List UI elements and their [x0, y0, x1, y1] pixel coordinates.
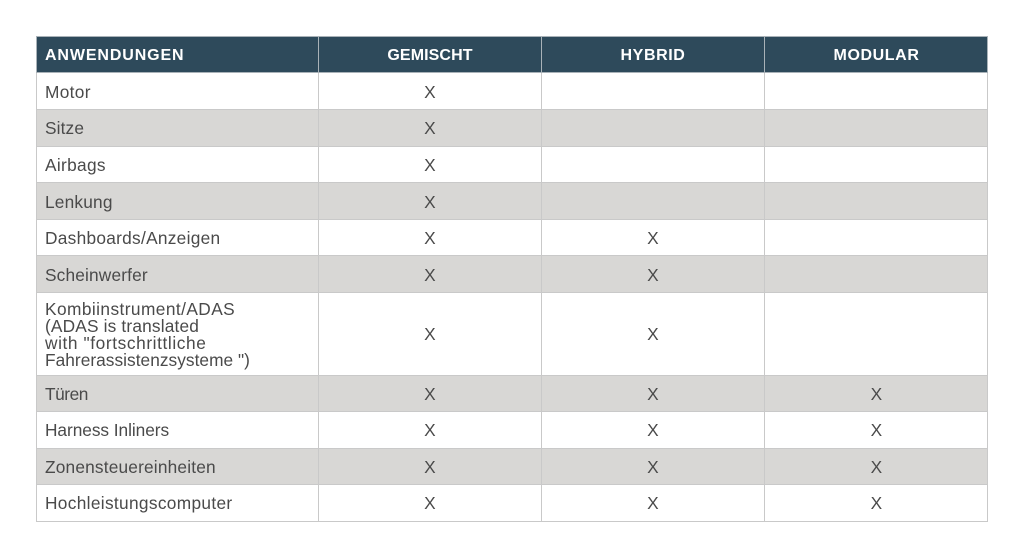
row: Scheinwerfer: Scheinwerfer: [45, 264, 148, 284]
row: Zonensteuereinheiten: X: [871, 457, 882, 477]
row: Motor: Motor: [45, 82, 91, 102]
header row: [36, 36, 988, 73]
row: Türen: X: [647, 384, 659, 404]
row: Türen: Türen: [45, 384, 88, 404]
row: Dashboards/Anzeigen: X: [424, 228, 436, 248]
row: Airbags: X: [424, 155, 436, 175]
row: Scheinwerfer: X: [647, 264, 659, 284]
row: Lenkung: X: [424, 192, 436, 212]
row: Harness Inliners: Harness Inliners: [45, 420, 169, 440]
row: Zonensteuereinheiten: X: [424, 457, 436, 477]
row: Kombiinstrument/ADAS: X: [647, 324, 659, 344]
header row: ANWENDUNGEN: [45, 46, 184, 64]
row: Motor: [36, 73, 988, 110]
row: Zonensteuereinheiten: Zonensteuereinheiten: [45, 457, 216, 477]
row: Harness Inliners: X: [647, 420, 659, 440]
row: Hochleistungscomputer: Hochleistungscomputer: [45, 492, 233, 512]
row: Kombiinstrument/ADAS: [36, 293, 988, 376]
row: Sitze: X: [424, 118, 436, 138]
header row: GEMISCHT: [387, 46, 473, 64]
row: Zonensteuereinheiten: [36, 449, 988, 485]
row: Airbags: Airbags: [45, 155, 106, 175]
row: Dashboards/Anzeigen: [36, 220, 988, 256]
row: Türen: [36, 376, 988, 412]
row: Hochleistungscomputer: X: [647, 492, 659, 512]
row: Kombiinstrument/ADAS: Kombiinstrument/ADAS: [45, 299, 235, 319]
row: Airbags: [36, 147, 988, 183]
row: Sitze: [36, 110, 988, 147]
row: Hochleistungscomputer: [36, 485, 988, 522]
row: Kombiinstrument/ADAS: Fahrerassistenzsysteme "): [45, 350, 250, 370]
row: Lenkung: Lenkung: [45, 192, 113, 212]
row: Sitze: Sitze: [45, 118, 84, 138]
header row: MODULAR: [834, 46, 919, 64]
row: Motor: X: [424, 82, 436, 102]
row: Türen: X: [424, 384, 436, 404]
row: Harness Inliners: [36, 412, 988, 449]
row: Kombiinstrument/ADAS: X: [424, 324, 436, 344]
row: Scheinwerfer: [36, 256, 988, 293]
row: Dashboards/Anzeigen: Dashboards/Anzeigen: [45, 228, 220, 248]
row: Türen: X: [871, 384, 882, 404]
row: Hochleistungscomputer: X: [424, 492, 436, 512]
row: Scheinwerfer: X: [424, 264, 436, 284]
row: Kombiinstrument/ADAS: with "fortschrittliche: [45, 333, 206, 353]
row: Kombiinstrument/ADAS: (ADAS is translated: [45, 316, 199, 336]
row: Dashboards/Anzeigen: X: [647, 228, 659, 248]
row: Hochleistungscomputer: X: [871, 492, 882, 512]
row: Harness Inliners: X: [871, 420, 882, 440]
header row: HYBRID: [621, 46, 685, 64]
row: Zonensteuereinheiten: X: [647, 457, 659, 477]
row: Lenkung: [36, 183, 988, 220]
row: Harness Inliners: X: [424, 420, 436, 440]
